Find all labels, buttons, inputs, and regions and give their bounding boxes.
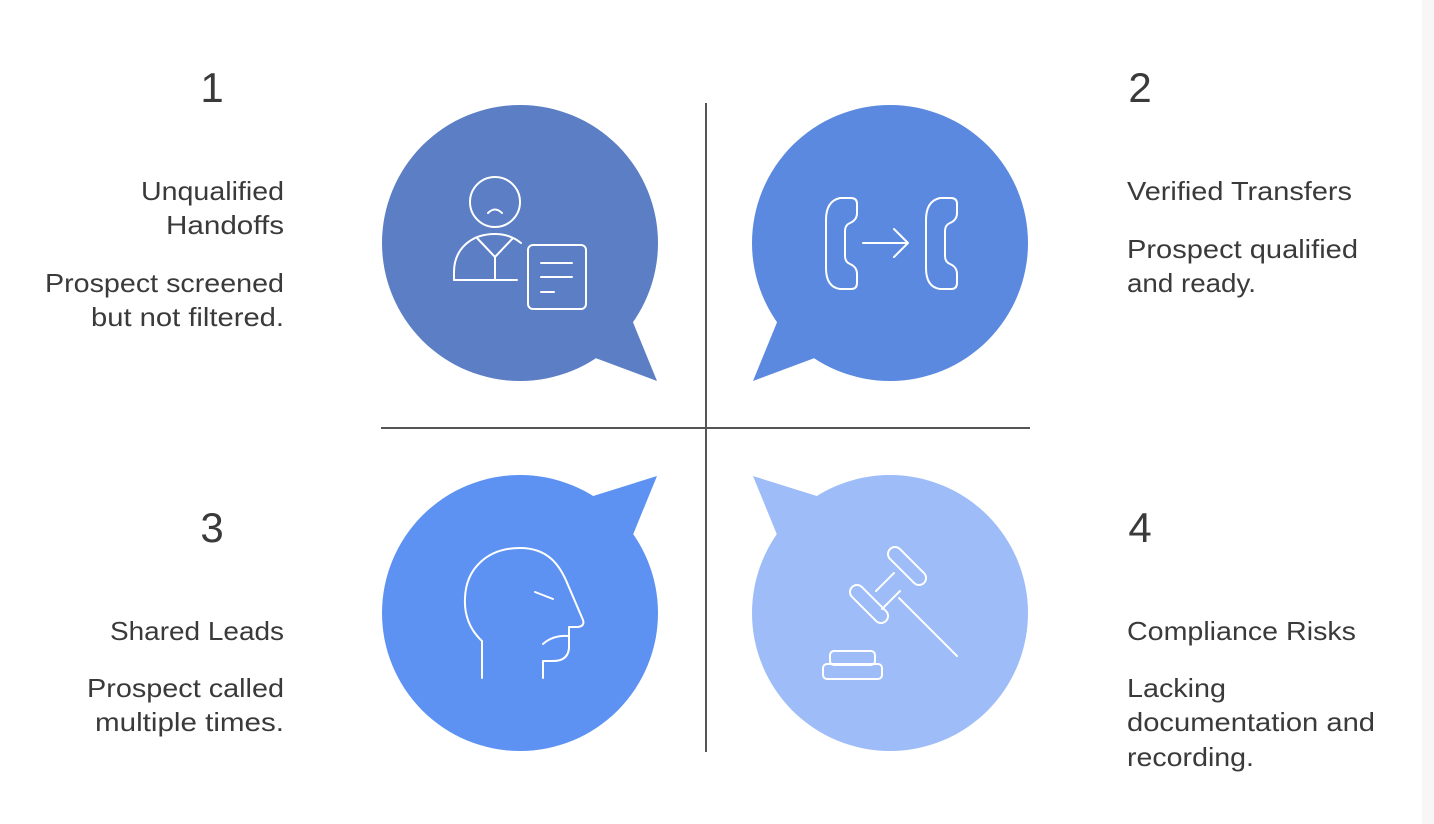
text 2: Prospect qualified: [1127, 234, 1358, 264]
icon: gavel: [823, 544, 957, 679]
bubble 2: [752, 105, 1028, 381]
text 1: [45, 64, 284, 332]
text 2: [1127, 64, 1358, 298]
text 3: 3: [200, 504, 224, 551]
divider lines: [381, 103, 1030, 752]
text 2: and ready.: [1127, 268, 1256, 298]
text 1: Unqualified: [141, 176, 284, 206]
text 3: [87, 504, 284, 737]
icon: head profile: [465, 548, 583, 678]
text 3: multiple times.: [95, 707, 284, 737]
text 3: Shared Leads: [110, 616, 284, 646]
text 4: [1127, 504, 1375, 772]
bubble 1: [382, 105, 658, 381]
text 1: Prospect screened: [45, 268, 284, 298]
text 1: but not filtered.: [91, 302, 284, 332]
text 2: Verified Transfers: [1127, 176, 1352, 206]
bubble 3: [382, 475, 658, 751]
bubble 4: [752, 475, 1028, 751]
text 1: Handoffs: [166, 210, 284, 240]
text 4: Compliance Risks: [1127, 616, 1356, 646]
icon: phone transfer: [826, 198, 957, 289]
text 4: documentation and: [1127, 707, 1375, 737]
text 4: 4: [1128, 504, 1152, 551]
text 1: 1: [200, 64, 224, 111]
text 3: Prospect called: [87, 673, 284, 703]
text 2: 2: [1128, 64, 1152, 111]
text 4: Lacking: [1127, 673, 1226, 703]
icon: person with document: [454, 177, 586, 309]
text 4: recording.: [1127, 742, 1254, 772]
